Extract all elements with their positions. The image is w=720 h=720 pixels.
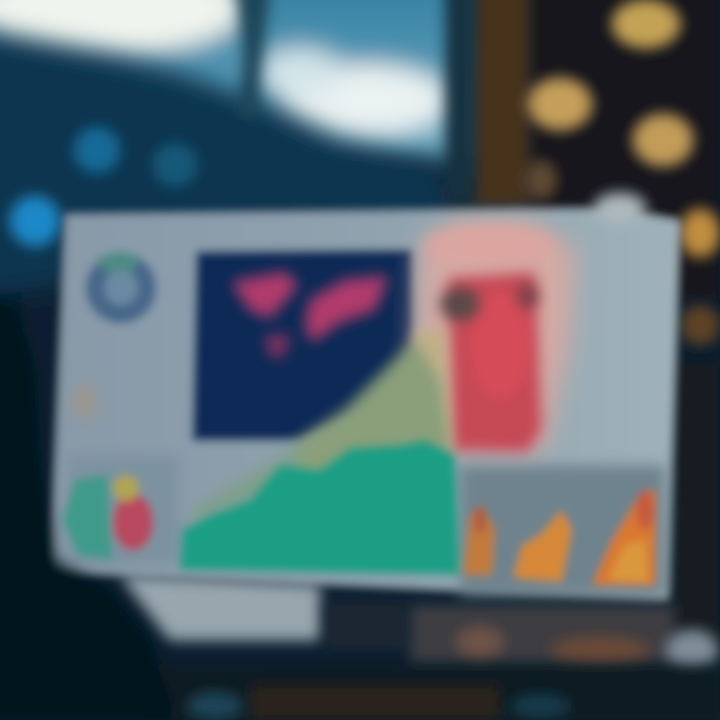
olive area chart [190, 340, 450, 525]
silhouette of viewer [0, 300, 175, 720]
right side lower background [670, 360, 720, 660]
map panel [193, 250, 415, 440]
blue bokeh lights [10, 127, 197, 246]
desk foreground [150, 665, 720, 720]
green area chart [180, 440, 460, 575]
monitor screen [50, 193, 680, 600]
monitor bottom edge and keyboard area [120, 575, 718, 670]
warm lights [525, 0, 720, 345]
small side marks [72, 384, 98, 420]
orange bar charts lower right [463, 490, 656, 585]
map shapes [232, 272, 388, 358]
pie charts lower left [62, 475, 153, 560]
portrait panel [415, 222, 575, 452]
donut chart [86, 252, 156, 323]
